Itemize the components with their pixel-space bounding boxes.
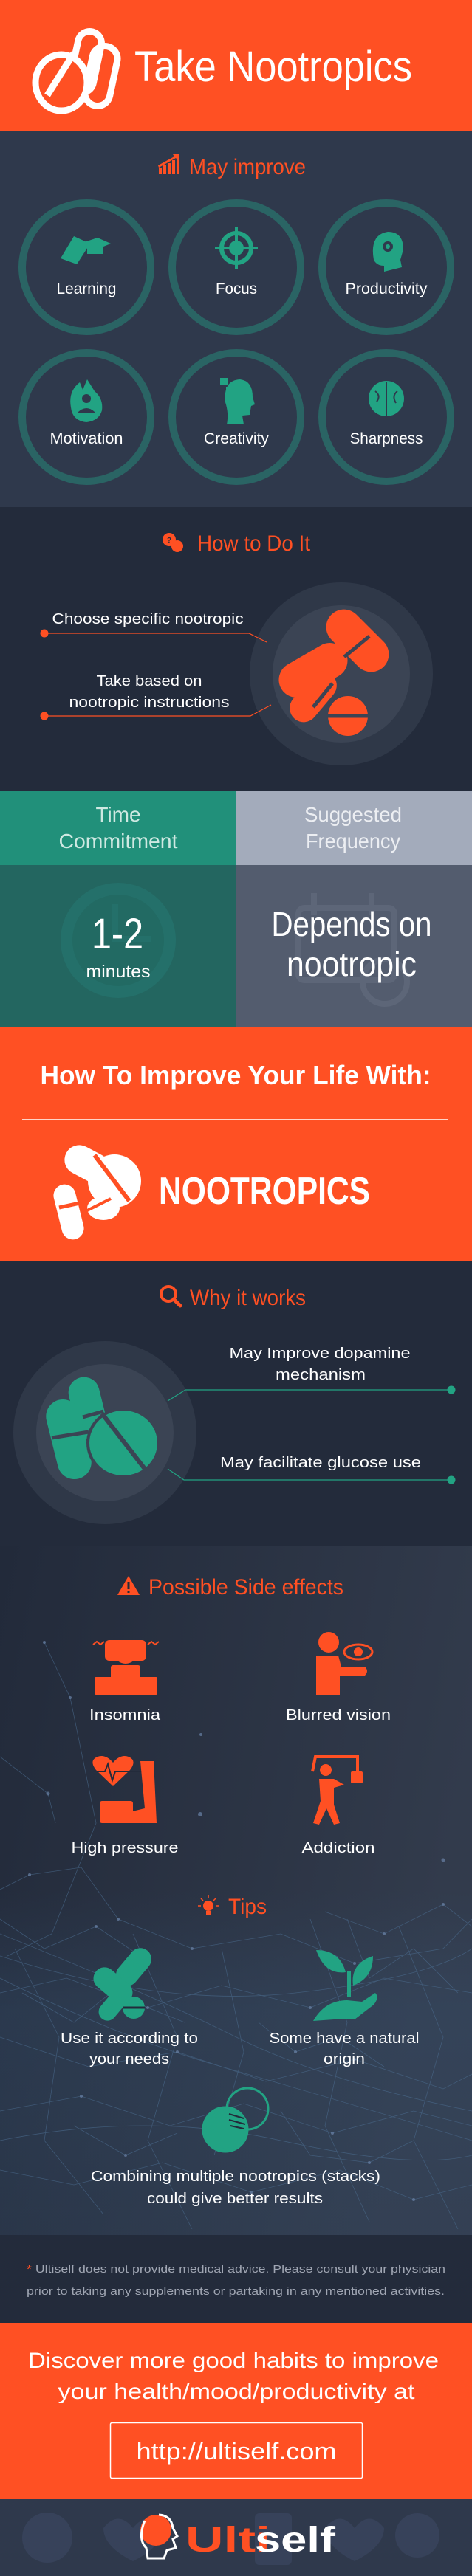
reason: dopamine [168, 1346, 455, 1401]
panel: call to action: your health/mood/productivity at [58, 2380, 415, 2404]
panel: time commitment: minutes [86, 962, 151, 981]
reason: glucose [168, 1455, 455, 1484]
button: url: http://ultiself.com [136, 2438, 337, 2465]
title: how to improve: How To Improve Your Life With: [40, 1060, 431, 1090]
panel: side effects and tips [0, 1546, 472, 2235]
logo: ultiself: self [255, 2521, 336, 2560]
step: take [40, 673, 271, 720]
panel: why it works [0, 1261, 472, 1546]
tip: natural origin: Some have a natural [269, 2031, 420, 2047]
panel: suggested frequency: nootropic [287, 945, 417, 983]
item: focus [172, 203, 301, 331]
disclaimer: prior to taking any supplements or partaking in any mentioned activities. [27, 2285, 445, 2298]
step: take: nootropic instructions [69, 695, 229, 711]
panel: call to action: Discover more good habits to improve [28, 2349, 439, 2373]
title: nootropics: NOOTROPICS [159, 1170, 370, 1213]
heading: why it works: Why it works [190, 1286, 306, 1310]
illustration: green pills circle [13, 1341, 196, 1524]
panel: suggested frequency: Suggested [304, 803, 402, 826]
side effect: blurred vision [286, 1632, 391, 1723]
panel: time commitment: Time [96, 803, 140, 826]
disclaimer [0, 2235, 472, 2323]
item: creativity: Creativity [204, 430, 269, 447]
heading: may improve [158, 154, 306, 179]
button: url [111, 2422, 362, 2479]
panel: time commitment: 1-2 [92, 910, 143, 958]
panel: call to action [0, 2323, 472, 2502]
item: motivation: Motivation [50, 430, 123, 447]
step: choose: Choose specific nootropic [52, 611, 244, 627]
heading: tips: Tips [228, 1895, 267, 1919]
side effect: insomnia: Insomnia [89, 1707, 161, 1723]
tip: use according to needs: Use it according to [61, 2031, 198, 2047]
side effect: high pressure [71, 1756, 179, 1856]
item: creativity [172, 353, 301, 481]
heading: tips [198, 1895, 267, 1919]
item: productivity [322, 203, 451, 331]
tip: use according to needs: your needs [89, 2051, 169, 2067]
tip: natural origin [269, 1950, 420, 2067]
panel: header [0, 0, 472, 131]
panel: improve your life [0, 1027, 472, 1261]
icon: pills outline [35, 30, 120, 111]
item: sharpness [322, 353, 451, 481]
item: motivation [22, 353, 151, 481]
tip: stacks [91, 2088, 380, 2207]
panel: time commitment [0, 791, 236, 1027]
disclaimer: * Ultiself does not provide medical advice. Please consult your physician [27, 2263, 445, 2276]
icon: white pills [51, 1140, 141, 1242]
step: take: Take based on [96, 673, 202, 689]
tip: use according to needs [61, 1943, 198, 2067]
heading: may improve: May improve [189, 155, 306, 179]
item: sharpness: Sharpness [350, 430, 423, 447]
item: focus: Focus [216, 280, 257, 297]
illustration: orange pills circle [250, 582, 433, 765]
side effect: addiction [301, 1757, 375, 1856]
side effect: high pressure: High pressure [71, 1840, 179, 1856]
panel: suggested frequency: Depends on [272, 905, 431, 943]
footer [0, 2499, 472, 2576]
tip: stacks: Combining multiple nootropics (stacks) [91, 2169, 380, 2185]
reason: dopamine: May Improve dopamine [229, 1346, 411, 1362]
tip: stacks: could give better results [147, 2191, 323, 2207]
icon: calendar watermark [298, 893, 407, 1004]
panel: how to do it [0, 507, 472, 791]
side effect: blurred vision: Blurred vision [286, 1707, 391, 1723]
step: choose [40, 611, 267, 642]
logo: ultiself [140, 2515, 336, 2560]
item: learning [22, 203, 151, 331]
panel: time commitment: Commitment [59, 830, 178, 853]
panel: suggested frequency: Frequency [306, 830, 400, 853]
tip: natural origin: origin [324, 2051, 365, 2067]
panel: may improve [0, 131, 472, 507]
item: productivity: Productivity [346, 280, 428, 297]
icon: clock watermark [61, 883, 176, 998]
item: learning: Learning [56, 280, 117, 297]
logo: ultiself: Ulti [185, 2521, 270, 2560]
panel: suggested frequency [236, 791, 472, 1027]
side effect: insomnia [89, 1640, 161, 1723]
reason: glucose: May facilitate glucose use [220, 1455, 421, 1471]
heading: how to do it: How to Do It [197, 531, 311, 556]
side effect: addiction: Addiction [301, 1840, 375, 1856]
heading: possible side effects: Possible Side effects [148, 1575, 343, 1599]
heading: how to do it: ? [167, 537, 171, 545]
title: Take Nootropics [134, 43, 412, 91]
reason: dopamine: mechanism [276, 1367, 366, 1383]
